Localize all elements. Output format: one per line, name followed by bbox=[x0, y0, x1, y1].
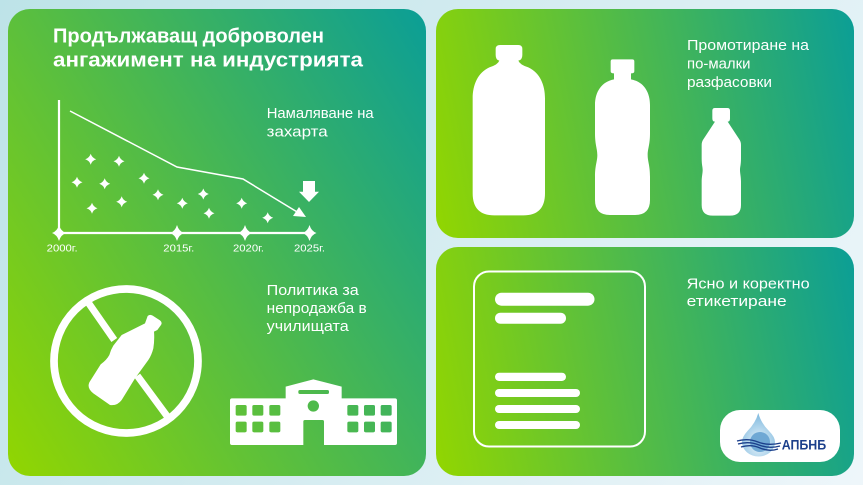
chart: sugar reduction bbox=[47, 100, 325, 254]
logo: АПБНБ bbox=[720, 410, 840, 462]
chart: sugar reduction: 2025г. bbox=[294, 242, 325, 254]
title: ангажимент на индустрията bbox=[53, 50, 364, 72]
title bbox=[53, 26, 364, 72]
text: smaller packaging: разфасовки bbox=[687, 74, 772, 91]
text: sugar reduction: Намаляване на bbox=[267, 105, 374, 122]
logo: АПБНБ: АПБНБ bbox=[782, 438, 826, 453]
panel: industry commitment bbox=[8, 9, 426, 476]
text: smaller packaging bbox=[687, 37, 810, 91]
icon: label document bbox=[474, 272, 645, 446]
chart: sugar reduction: 2015г. bbox=[163, 242, 194, 254]
title: Продължаващ доброволен bbox=[53, 26, 324, 48]
text: school policy: Политика за bbox=[267, 282, 359, 299]
text: clear labelling: Ясно и коректно bbox=[687, 275, 810, 292]
icon: three bottles bbox=[473, 45, 741, 216]
icon: school building bbox=[230, 379, 397, 445]
text: smaller packaging: Промотиране на bbox=[687, 37, 810, 54]
text: clear labelling bbox=[687, 275, 810, 310]
text: school policy: училищата bbox=[267, 318, 349, 335]
text: clear labelling: етикетиране bbox=[687, 293, 787, 310]
text: smaller packaging: по-малки bbox=[687, 56, 750, 72]
text: sugar reduction: захарта bbox=[267, 124, 328, 141]
chart: sugar reduction: 2020г. bbox=[233, 242, 264, 254]
text: school policy: непродажба в bbox=[267, 300, 367, 317]
text: school policy bbox=[267, 282, 367, 335]
chart: sugar reduction: 2000г. bbox=[47, 242, 78, 254]
text: sugar reduction bbox=[267, 105, 374, 141]
icon: no bottle sign bbox=[54, 289, 198, 433]
panel: clear labelling bbox=[436, 247, 854, 476]
icon: down arrow bbox=[299, 181, 319, 202]
panel: smaller packaging bbox=[436, 9, 854, 238]
